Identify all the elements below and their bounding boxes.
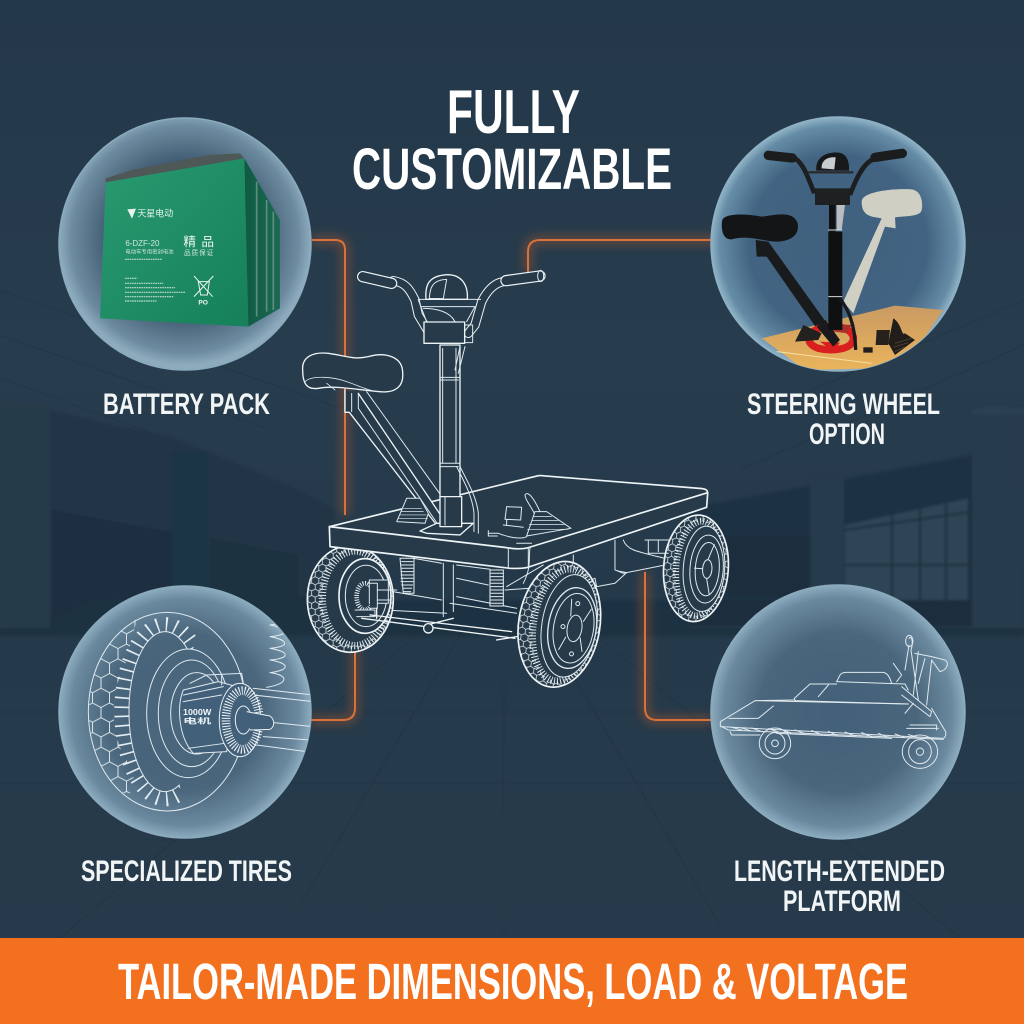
label: length-extended platform [734,855,945,918]
title [352,78,672,202]
icon: battery: 6-DZF-20 [125,239,160,248]
undercarriage frame [383,540,670,617]
label: specialized tires: SPECIALIZED TIRES [81,855,292,888]
panel: battery pack [59,118,311,370]
icon: battery: PO [198,299,208,306]
icon: battery: 品质保证 [184,248,214,257]
icon: tire and motor line drawing: 电机 [183,717,213,726]
title: CUSTOMIZABLE [352,137,672,202]
icon: steering and seat parts [722,153,943,370]
icon: battery: 天星电动 [137,208,173,219]
label: battery pack: BATTERY PACK [103,388,270,421]
icon: battery: 电动车专用密封电池 [125,247,174,255]
label: steering wheel option: OPTION [809,418,885,451]
label: length-extended platform: PLATFORM [783,885,901,918]
icon: battery [100,153,280,327]
front left wheel [307,546,397,652]
steering column and handlebars [363,270,544,535]
icon: tire and motor line drawing: 1000W [183,707,211,717]
panel: steering wheel option [711,117,965,371]
rear right wheel [660,513,732,624]
label: length-extended platform: LENGTH-EXTENDED [734,855,945,888]
bottom banner [0,938,1024,1024]
icon: extended platform line drawing [720,635,947,768]
label: steering wheel option: STEERING WHEEL [747,388,940,421]
central cart line drawing [303,270,732,693]
icon: tire and motor line drawing [88,612,313,811]
label: steering wheel option [747,388,940,451]
icon: battery: 精品 [183,235,214,249]
front right wheel [509,555,609,693]
panel: length-extended platform [711,585,965,839]
seat and arm [303,353,447,525]
panel: specialized tires [59,586,313,838]
connector lines [310,240,718,720]
platform deck [329,476,708,583]
title: FULLY [447,78,580,147]
tie rod [362,608,517,640]
deck controls: pedal, display and joystick [397,494,571,543]
